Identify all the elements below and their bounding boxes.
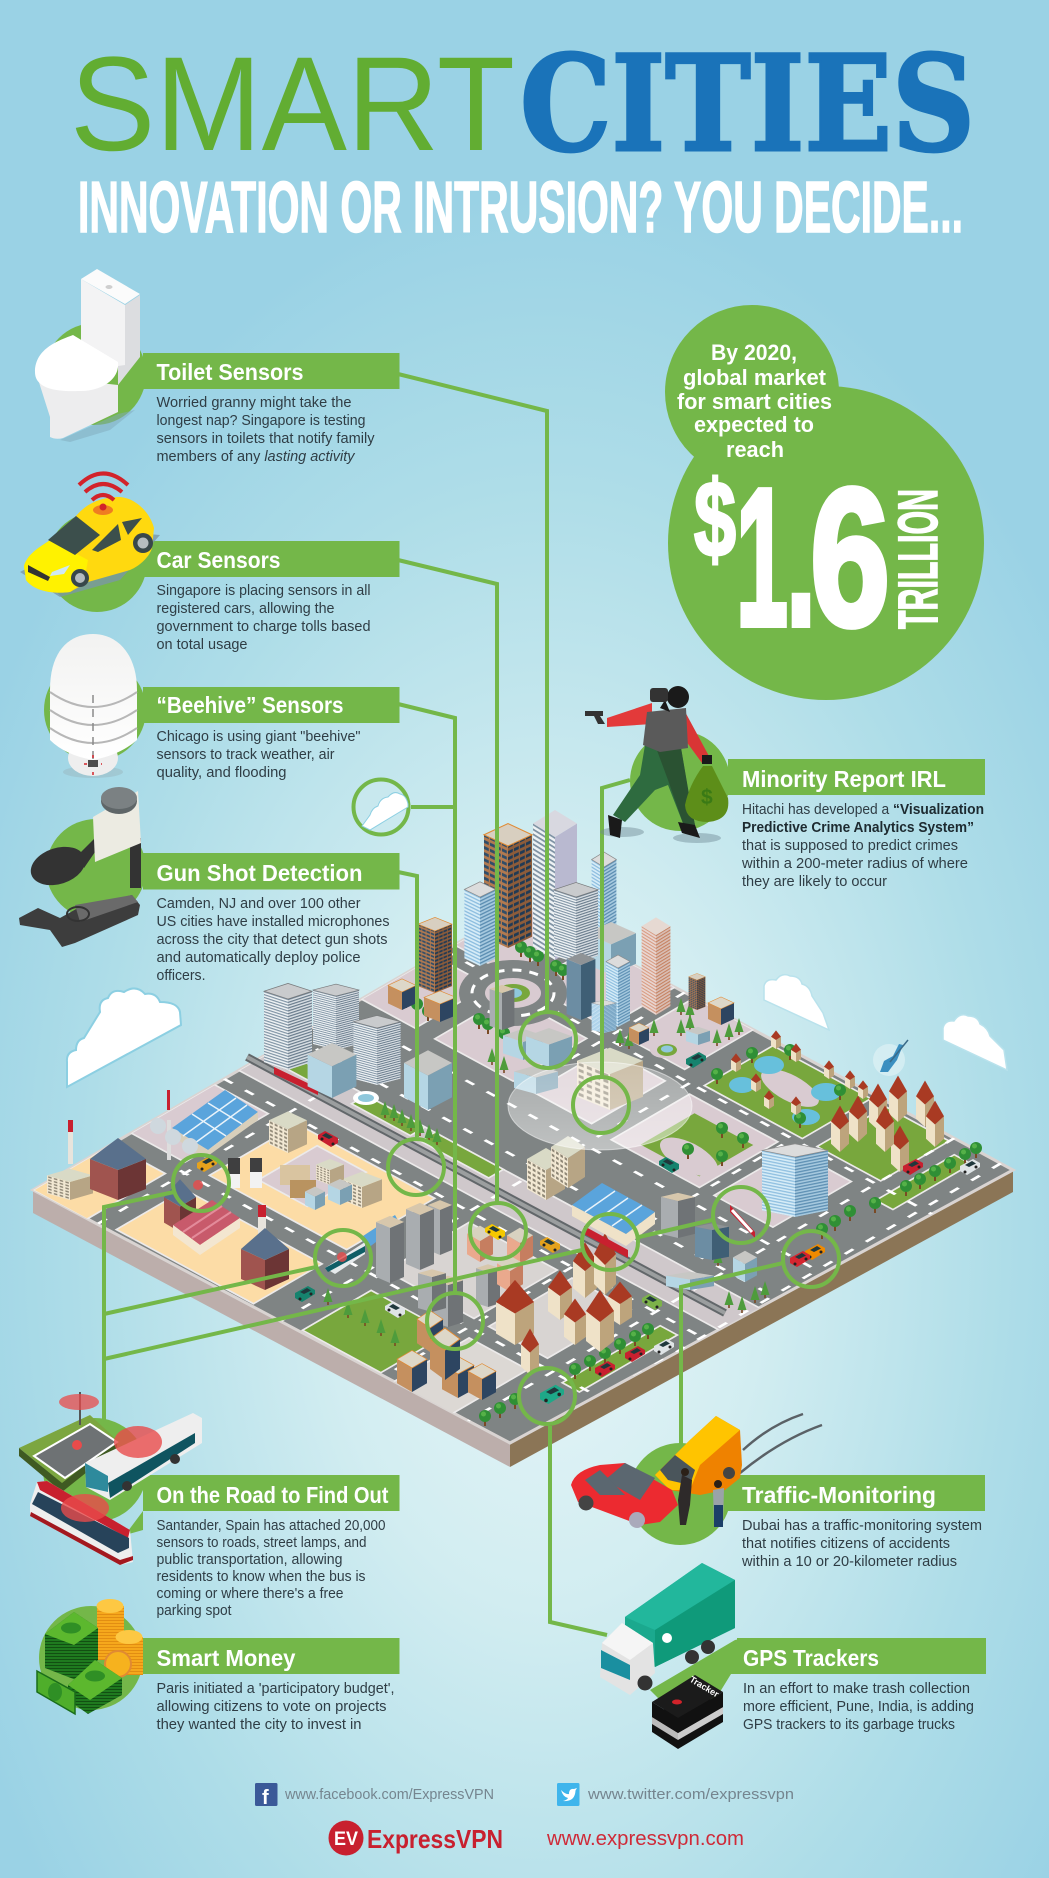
- buildings: right of skyline: [514, 973, 734, 1110]
- city blocks and roads: [33, 905, 1013, 1455]
- big number: 6: [810, 448, 890, 667]
- buildings: factories and warehouses: [47, 1090, 400, 1290]
- buildings: right side: [527, 1030, 944, 1290]
- text: gps body: [743, 1681, 974, 1733]
- footer: website: www.expressvpn.com: [546, 1828, 744, 1850]
- callout text: [677, 340, 832, 462]
- big number: $: [694, 458, 736, 579]
- text: gun shot body: across the city that detect gun shots: [156, 932, 388, 948]
- text: traffic body: [741, 1518, 982, 1570]
- icon: sensor car: [20, 474, 160, 597]
- cloud: centre right: [764, 975, 829, 1030]
- elevated railway: [247, 1057, 725, 1313]
- callout text: expected to: [694, 412, 814, 437]
- title: [70, 27, 975, 182]
- text: smart money body: Paris initiated a 'participatory budget',: [156, 1681, 394, 1697]
- icon: helicopter: [873, 1040, 908, 1076]
- text: car sensors body: government to charge tolls based: [156, 619, 370, 635]
- marker: weather cloud: [354, 780, 408, 834]
- text: gun shot body: US cities have installed microphones: [156, 914, 390, 930]
- text: toilet sensors body: longest nap? Singapore is testing: [156, 413, 366, 429]
- icon: masked thief with money bag: [585, 686, 728, 843]
- text: beehive body: [156, 729, 360, 781]
- text: traffic body: within a 10 or 20-kilometer radius: [741, 1554, 957, 1570]
- text: on the road body: [156, 1518, 386, 1619]
- text: beehive body: sensors to track weather, air: [156, 747, 335, 763]
- text: toilet sensors body: Worried granny might take the: [156, 395, 352, 411]
- footer: expressvpn logo: [328, 1820, 503, 1856]
- text: smart money body: they wanted the city to invest in: [156, 1717, 362, 1733]
- callout text: for smart cities: [677, 389, 832, 414]
- panel: minority report: Minority Report IRL: [742, 766, 946, 792]
- panel: on the road: [19, 1392, 400, 1619]
- callout: market size: [665, 305, 984, 700]
- buildings: mansions: [496, 1233, 632, 1375]
- panel: smart money: [37, 1599, 400, 1733]
- magnifier lens: [508, 1062, 692, 1150]
- text: gps body: more efficient, Pune, India, is adding: [743, 1699, 974, 1715]
- text: on the road body: Santander, Spain has attached 20,000: [156, 1518, 386, 1534]
- callout text: reach: [726, 437, 784, 462]
- icon: cash and coins: [37, 1599, 143, 1714]
- text: smart money body: [156, 1681, 394, 1733]
- panel: smart money: Smart Money: [156, 1645, 296, 1671]
- text: car sensors body: [156, 583, 370, 653]
- text: minority report body: Predictive Crime Analytics System”: [742, 820, 974, 836]
- footer: facebook: [255, 1783, 494, 1809]
- train: upper left: [274, 1067, 318, 1095]
- text: gun shot body: Camden, NJ and over 100 other: [156, 896, 361, 912]
- title: CITIES: [520, 27, 975, 182]
- panel: gun shot detection: [19, 787, 400, 984]
- panel: traffic monitoring: [571, 1414, 985, 1570]
- roundabout: [459, 960, 567, 1026]
- text: on the road body: coming or where there's a free: [156, 1586, 344, 1602]
- panel: traffic monitoring: Traffic-Monitoring: [742, 1482, 936, 1508]
- panel: gun shot detection: Gun Shot Detection: [156, 860, 362, 886]
- callout text: global market: [683, 365, 826, 390]
- panel: beehive sensors: [44, 634, 400, 781]
- icon: toilet: [35, 269, 140, 442]
- icon: garbage truck and tracker: Tracker: [688, 1674, 721, 1699]
- icon: garbage truck and tracker: [600, 1563, 735, 1749]
- text: minority report body: that is supposed to predict crimes: [742, 838, 958, 854]
- footer: facebook: www.facebook.com/ExpressVPN: [284, 1786, 494, 1803]
- text: traffic body: that notifies citizens of accidents: [742, 1536, 950, 1552]
- text: gps body: GPS trackers to its garbage trucks: [743, 1717, 955, 1733]
- big number: 1: [736, 448, 788, 667]
- icon: masked thief with money bag: $: [701, 786, 713, 809]
- text: on the road body: sensors to roads, street lamps, and: [156, 1535, 366, 1551]
- text: toilet sensors body: members of any lasting activity: [156, 449, 355, 465]
- icon: beehive sensor: [50, 634, 137, 778]
- big number: .: [786, 448, 816, 667]
- callout text: By 2020,: [711, 340, 797, 365]
- towers: left cluster: [264, 983, 452, 1110]
- text: on the road body: residents to know when the bus is: [156, 1569, 366, 1585]
- panel: on the road: On the Road to Find Out: [156, 1482, 389, 1508]
- panel: beehive sensors: “Beehive” Sensors: [156, 692, 344, 718]
- vehicles: [193, 1052, 980, 1404]
- footer: facebook: f: [262, 1787, 269, 1809]
- connector lines: [104, 374, 783, 1635]
- panel: toilet sensors: Toilet Sensors: [156, 359, 304, 385]
- title: SMART: [70, 30, 515, 179]
- text: gps body: In an effort to make trash collection: [743, 1681, 970, 1697]
- footer: expressvpn logo: ExpressVPN: [367, 1824, 503, 1854]
- footer: expressvpn logo: EV: [334, 1829, 358, 1850]
- park ponds and plaza: [353, 1042, 841, 1184]
- footer: twitter: [557, 1783, 794, 1806]
- map marker circles: [173, 1012, 839, 1424]
- towers: central skyline: [388, 810, 670, 1060]
- panel: minority report: [585, 686, 985, 890]
- text: traffic body: Dubai has a traffic-monitoring system: [742, 1518, 982, 1534]
- icon: road, bus and tram: [19, 1392, 202, 1565]
- text: beehive body: quality, and flooding: [156, 765, 286, 781]
- trees: [324, 941, 982, 1426]
- text: minority report body: they are likely to occur: [742, 874, 887, 890]
- panel: toilet sensors: [35, 269, 400, 465]
- text: minority report body: within a 200-meter radius of where: [741, 856, 968, 872]
- text: gun shot body: officers.: [156, 968, 206, 984]
- panel: gps trackers: GPS Trackers: [743, 1645, 879, 1671]
- panel: car sensors: [20, 474, 400, 653]
- text: gun shot body: [156, 896, 390, 984]
- city slab: [33, 905, 1013, 1467]
- big number: TRILLION: [886, 489, 949, 629]
- buildings: lower central: [376, 1200, 533, 1400]
- footer: twitter: www.twitter.com/expressvpn: [587, 1786, 794, 1803]
- text: minority report body: Hitachi has developed a “Visualization: [742, 802, 984, 818]
- isometric city map: [33, 810, 1013, 1467]
- text: on the road body: public transportation, allowing: [156, 1552, 342, 1568]
- text: minority report body: [741, 802, 984, 890]
- cloud: left: [67, 988, 181, 1087]
- text: toilet sensors body: [156, 395, 375, 465]
- text: on the road body: parking spot: [156, 1603, 232, 1619]
- text: toilet sensors body: sensors in toilets that notify family: [156, 431, 375, 447]
- text: car sensors body: registered cars, allowing the: [156, 601, 334, 617]
- text: smart money body: allowing citizens to vote on projects: [156, 1699, 386, 1715]
- text: car sensors body: Singapore is placing sensors in all: [156, 583, 370, 599]
- text: car sensors body: on total usage: [156, 637, 248, 653]
- panel: gps trackers: [600, 1563, 986, 1749]
- big number: [694, 448, 949, 667]
- text: beehive body: Chicago is using giant "beehive": [156, 729, 360, 745]
- cloud: far right: [943, 1015, 1007, 1070]
- text: gun shot body: and automatically deploy police: [156, 950, 360, 966]
- icon: car crash with drivers: [571, 1414, 822, 1528]
- icon: microphone sensor and handgun: [19, 787, 141, 947]
- panel: car sensors: Car Sensors: [156, 547, 280, 573]
